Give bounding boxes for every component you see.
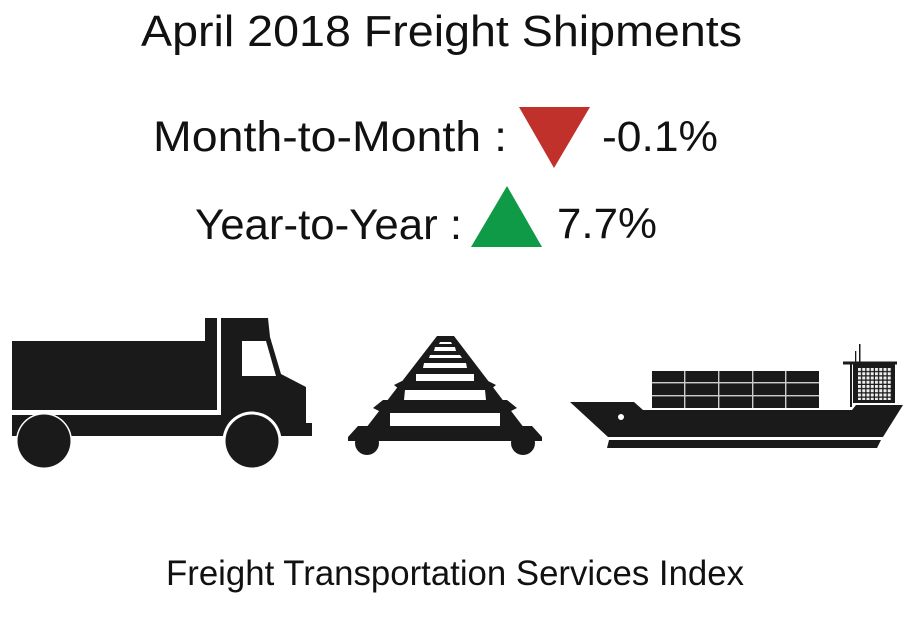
icon: container ship (570, 344, 903, 448)
ship hull (570, 402, 903, 437)
icon: green up triangle (471, 186, 542, 247)
icon: red down triangle (519, 107, 590, 168)
porthole (618, 414, 624, 420)
icon: railroad track (348, 336, 542, 455)
month-to-month value: -0.1% (602, 113, 718, 161)
title: April 2018 Freight Shipments (141, 7, 742, 56)
footer caption: Freight Transportation Services Index (166, 554, 744, 593)
icon: truck (12, 318, 312, 470)
container stack (652, 371, 819, 408)
ship bridge tower (843, 344, 897, 407)
month-to-month label: Month-to-Month : (153, 113, 507, 161)
ship keel stripe (607, 440, 881, 448)
year-to-year label: Year-to-Year : (195, 201, 462, 249)
year-to-year value: 7.7% (557, 200, 657, 248)
